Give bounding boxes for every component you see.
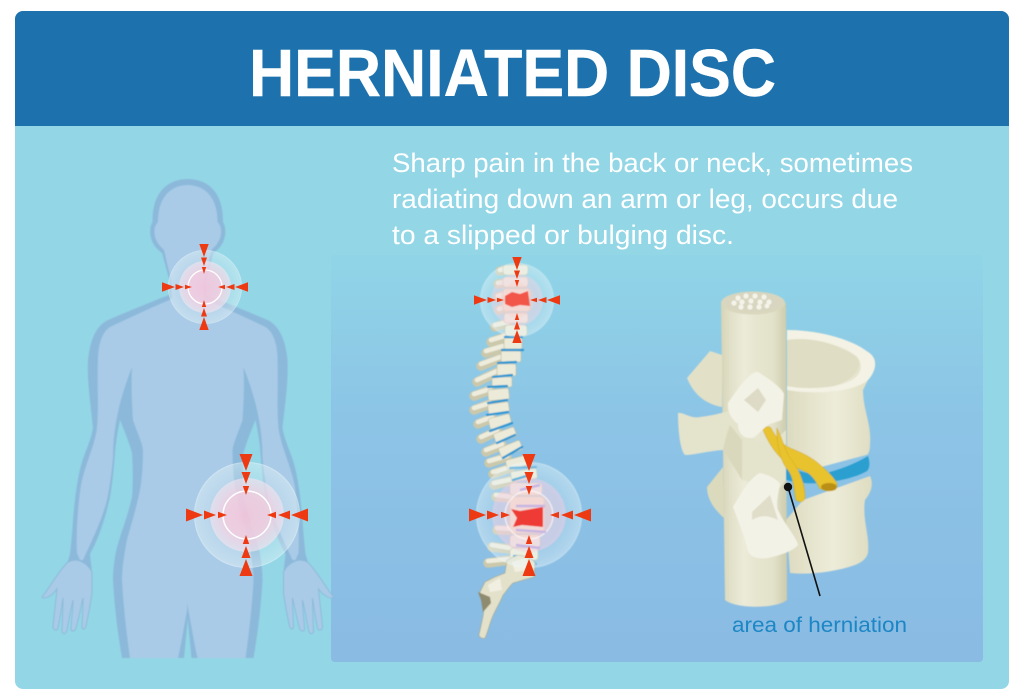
red inflammation: top <box>505 291 530 307</box>
spinal column <box>721 292 787 607</box>
upper facet hollow <box>744 388 766 412</box>
text block: description: Sharp pain in the back or neck, sometimes <box>392 148 913 178</box>
pointer dot <box>784 483 792 491</box>
text block: description: to a slipped or bulging disc. <box>392 220 734 250</box>
upper vertebra body <box>787 330 875 470</box>
pain glow over spine: bottom <box>476 462 582 568</box>
upper white facet <box>728 372 784 438</box>
vertebra close-up illustration <box>678 292 875 607</box>
red inflammation: bottom <box>511 507 543 527</box>
pointer line <box>788 487 820 596</box>
pain marker: lower back on body <box>186 454 308 576</box>
lower vertebra body <box>786 476 872 574</box>
pedicle shade <box>723 425 742 480</box>
upper-left process <box>687 351 722 407</box>
pain marker: neck on body <box>162 244 248 330</box>
text block: description <box>392 148 913 250</box>
callout label: area of herniation <box>732 613 907 637</box>
spine illustration <box>474 263 582 638</box>
sacrum <box>479 555 535 638</box>
blue discs <box>487 337 536 564</box>
vertebra bodies <box>487 265 544 560</box>
pain glow over spine: top <box>480 263 554 337</box>
lower vertebra back process <box>707 467 724 518</box>
lower white facet <box>733 473 798 558</box>
lower facet hollow <box>752 495 778 520</box>
spinal nerve <box>763 427 837 502</box>
pain arrows: lower spine <box>469 454 591 576</box>
human body silhouette <box>42 179 334 658</box>
panel: spine and vertebra background <box>331 255 983 662</box>
sacrum shadow <box>478 592 491 612</box>
text block: description: radiating down an arm or leg, occurs due <box>392 184 898 214</box>
sacrum highlight <box>488 558 530 592</box>
panel: title banner <box>15 11 1009 126</box>
spinous processes <box>474 270 513 563</box>
callout: area of herniation <box>732 483 907 637</box>
process highlights <box>474 269 513 561</box>
transverse process and pedicle <box>678 408 786 488</box>
herniated lavender discs <box>516 485 546 548</box>
title: HERNIATED DISC <box>249 36 776 111</box>
herniated disc <box>786 456 869 483</box>
pain arrows: top of spine <box>474 257 560 343</box>
